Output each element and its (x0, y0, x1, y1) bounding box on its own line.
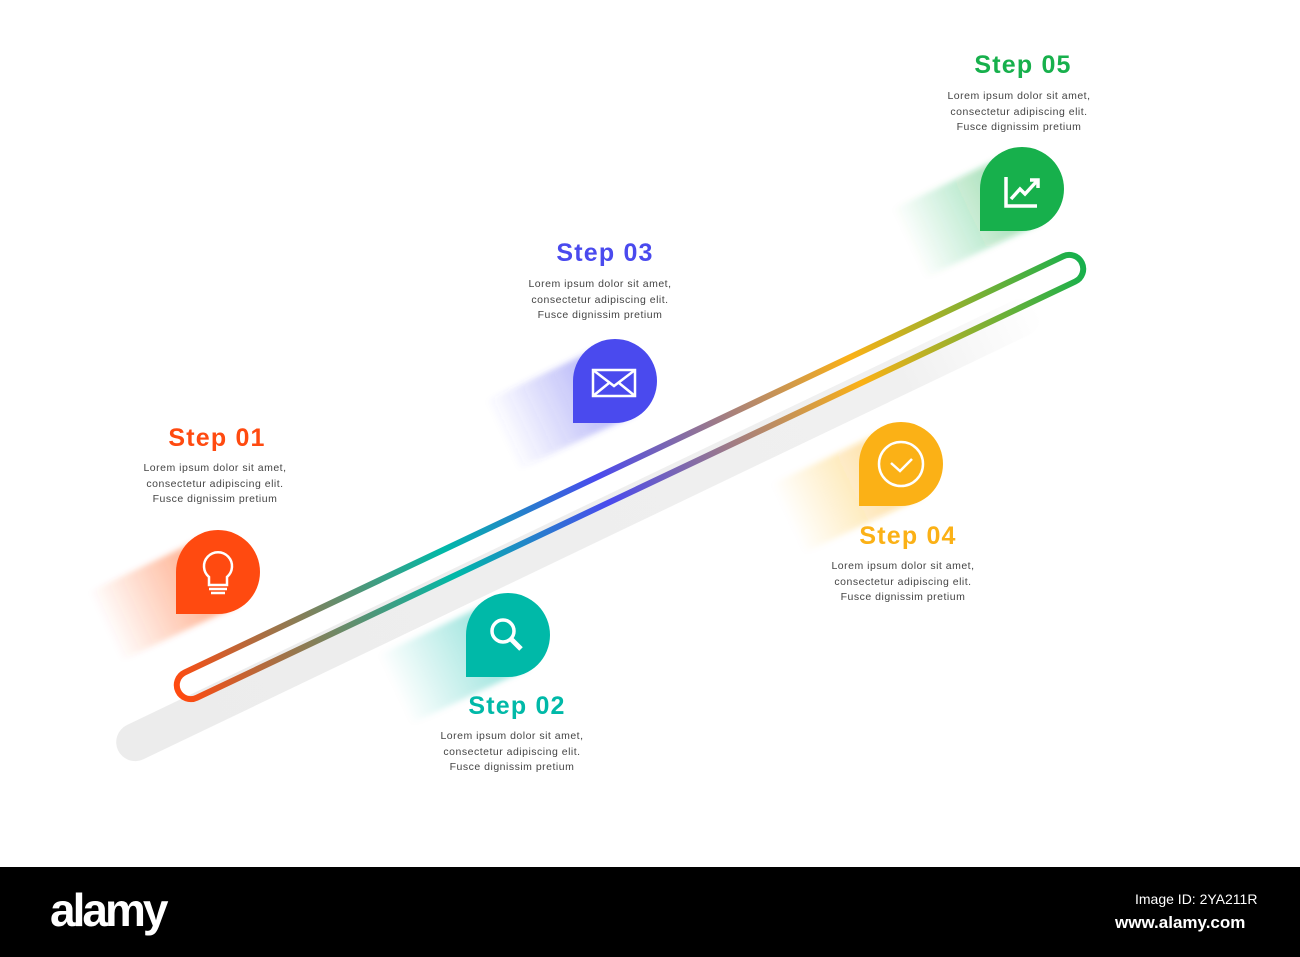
text: consectetur adipiscing elit. (531, 294, 669, 306)
text: Step 01 (168, 424, 266, 452)
icon 3: mail (573, 339, 657, 423)
footer (0, 867, 1300, 957)
text: Lorem ipsum dolor sit amet, (831, 560, 975, 572)
logo: alamy (50, 884, 165, 936)
text: Step 03 (556, 239, 654, 267)
text: Lorem ipsum dolor sit amet, (143, 462, 287, 474)
url: www.alamy.com (1115, 913, 1245, 932)
text: Fusce dignissim pretium (957, 121, 1081, 133)
track shadow (110, 293, 1046, 767)
icon 2: search (466, 593, 550, 677)
text: consectetur adipiscing elit. (146, 478, 284, 490)
step 01 text (143, 424, 287, 505)
icon 5: chart (980, 147, 1064, 231)
track (172, 250, 1088, 704)
step 05 text (947, 51, 1091, 133)
text: Fusce dignissim pretium (841, 591, 965, 603)
text: Lorem ipsum dolor sit amet, (440, 730, 584, 742)
icon 1: bulb (176, 530, 260, 614)
icon 4: clock (859, 422, 943, 506)
step 03 text (528, 239, 672, 321)
text: Step 04 (859, 522, 957, 550)
trails (88, 154, 1042, 724)
text: Lorem ipsum dolor sit amet, (947, 90, 1091, 102)
text: consectetur adipiscing elit. (950, 106, 1088, 118)
text: Fusce dignissim pretium (450, 761, 574, 773)
text: Fusce dignissim pretium (538, 309, 662, 321)
image id: Image ID: 2YA211R (1135, 891, 1257, 907)
text: consectetur adipiscing elit. (443, 746, 581, 758)
text: Step 02 (468, 692, 566, 720)
text: Lorem ipsum dolor sit amet, (528, 278, 672, 290)
text: Step 05 (974, 51, 1072, 79)
text: Fusce dignissim pretium (153, 493, 277, 505)
step 04 text (831, 522, 975, 603)
text: consectetur adipiscing elit. (834, 576, 972, 588)
step 02 text (440, 692, 584, 773)
